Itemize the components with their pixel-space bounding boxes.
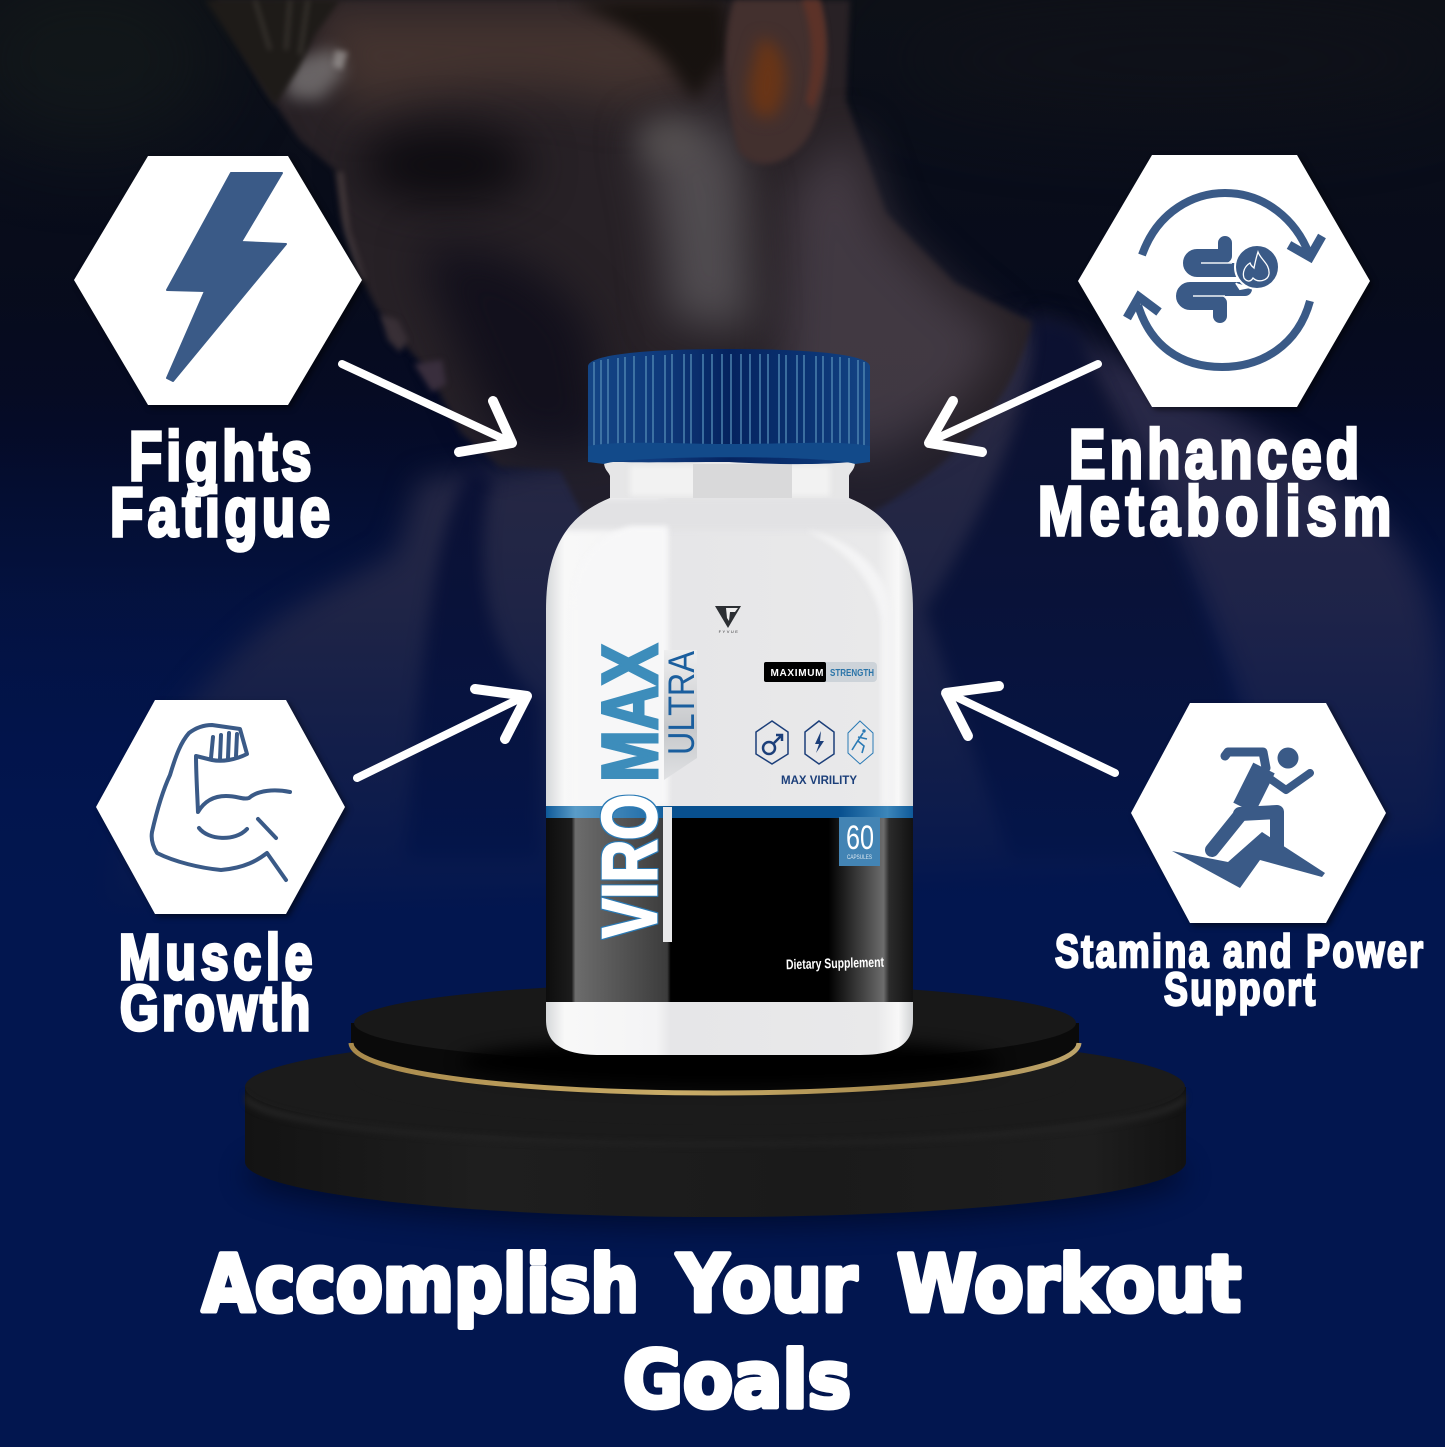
arrow: muscle growth to bottle bbox=[357, 689, 527, 778]
badge: maximum strength bbox=[764, 662, 877, 682]
heading: fights fatigue: Fatigue bbox=[110, 474, 330, 552]
badge: maximum strength: STRENGTH bbox=[830, 668, 874, 679]
forehead bbox=[310, 10, 710, 115]
neck shading bbox=[780, 130, 1000, 460]
label icons bbox=[756, 721, 873, 764]
heading: muscle growth bbox=[119, 922, 312, 1044]
lower face shadow bbox=[420, 248, 610, 450]
lower disc bbox=[245, 1087, 1186, 1217]
hexagon: stamina and power bbox=[1131, 703, 1386, 923]
bottle body bbox=[546, 495, 913, 1055]
product name: VIRO MAX: VIRO bbox=[587, 794, 673, 938]
gold ring bbox=[351, 1043, 1079, 1093]
title: accomplish your workout goals: Goals bbox=[623, 1336, 851, 1426]
icon: small runner bbox=[848, 721, 873, 764]
heading: enhanced metabolism: Enhanced bbox=[1069, 416, 1359, 494]
brand logo: FYVUE bbox=[719, 629, 739, 634]
icon: small bolt bbox=[805, 721, 834, 764]
icon: lightning bolt bbox=[167, 173, 286, 381]
forehead highlight bbox=[282, 48, 345, 100]
bottle neck bbox=[604, 462, 855, 505]
stubble cheek bbox=[640, 120, 752, 330]
product name: VIRO MAX bbox=[585, 644, 674, 942]
upper disc bbox=[354, 1023, 1076, 1125]
hexagon: fights fatigue bbox=[74, 156, 362, 405]
hexagon: enhanced metabolism bbox=[1078, 155, 1370, 407]
nose highlight bbox=[337, 172, 366, 282]
heading: stamina and power support bbox=[1055, 926, 1423, 1015]
product name: ULTRA: ULTRA bbox=[661, 651, 702, 755]
badge: maximum strength: MAXIMUM bbox=[770, 668, 824, 679]
arrow: enhanced metabolism to bottle bbox=[929, 364, 1098, 452]
gym backdrop bbox=[0, 0, 220, 150]
heading: muscle growth: Growth bbox=[120, 973, 310, 1044]
hair bbox=[205, 0, 728, 105]
shoulders and torso bbox=[100, 318, 1445, 920]
bottle contact shadow bbox=[460, 1038, 1000, 1086]
icon: flexed arm bbox=[152, 725, 290, 880]
product bottle bbox=[546, 349, 913, 1055]
head and neck bbox=[215, 0, 1032, 530]
heading: enhanced metabolism: Metabolism bbox=[1038, 473, 1391, 551]
title: accomplish your workout goals: Accomplish bbox=[202, 1240, 639, 1330]
podium bbox=[245, 983, 1186, 1227]
icon: male symbol bbox=[756, 721, 788, 764]
arrow: stamina to bottle bbox=[946, 686, 1115, 773]
ear bbox=[726, 0, 827, 164]
icon: metabolism cycle bbox=[1127, 193, 1322, 367]
icon: running man bbox=[1172, 748, 1325, 888]
heading: stamina and power support: Support bbox=[1164, 964, 1316, 1015]
badge: 60 capsules: CAPSULES bbox=[847, 855, 872, 861]
heading: fights fatigue bbox=[110, 418, 330, 552]
heading: fights fatigue: Fights bbox=[129, 418, 312, 496]
heading: stamina and power support: Stamina and Power bbox=[1055, 926, 1423, 977]
arrow: fights fatigue to bottle bbox=[342, 364, 512, 452]
brand logo bbox=[715, 606, 741, 634]
heading: enhanced metabolism bbox=[1038, 416, 1391, 551]
product name: VIRO MAX: MAX bbox=[585, 644, 674, 782]
label: dietary supplement: Dietary Supplement bbox=[786, 954, 884, 972]
badge: 60 capsules bbox=[839, 817, 880, 866]
hexagon: muscle growth bbox=[96, 700, 345, 914]
nostril and lips bbox=[380, 314, 408, 352]
eye socket bbox=[360, 127, 530, 203]
title: accomplish your workout goals: Workout bbox=[897, 1240, 1241, 1330]
heading: muscle growth: Muscle bbox=[119, 922, 312, 993]
badge: 60 capsules: 60 bbox=[846, 819, 874, 857]
title: accomplish your workout goals bbox=[202, 1240, 1241, 1426]
bottle cap bbox=[588, 349, 870, 464]
label: max virility: MAX VIRILITY bbox=[781, 773, 857, 787]
title: accomplish your workout goals: Your bbox=[676, 1240, 857, 1330]
